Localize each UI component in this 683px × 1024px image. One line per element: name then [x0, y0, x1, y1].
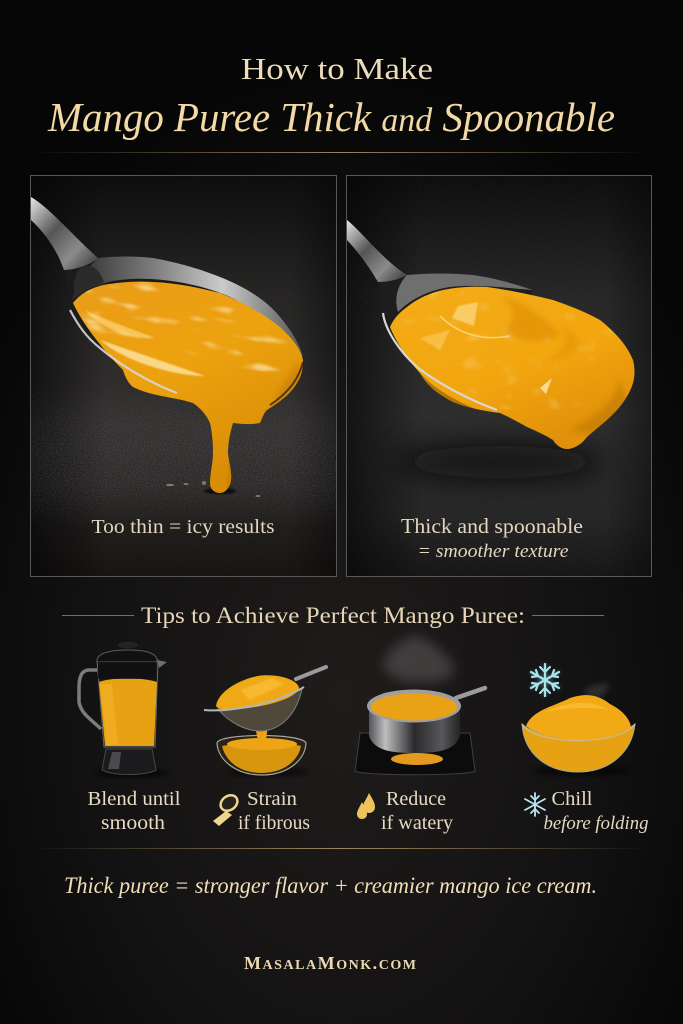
bowl body	[522, 724, 635, 772]
label: reduce: Reduce	[386, 788, 446, 810]
bowl rim	[522, 724, 635, 740]
label: blend: smooth	[101, 812, 165, 834]
mango puree: thin with drip	[69, 282, 304, 493]
steam	[384, 636, 455, 682]
mango puree: thick mound	[383, 287, 640, 449]
lower spoon rim over puree	[70, 310, 177, 393]
label: blend: Blend until	[88, 788, 181, 810]
bowl puree	[526, 695, 631, 740]
caption: too thin: Too thin = icy results	[92, 516, 275, 538]
caption: thick: = smoother texture	[418, 541, 568, 562]
puddle spatter	[166, 481, 260, 497]
caption: thick	[401, 514, 583, 562]
blender handle	[79, 670, 101, 729]
strainer rim	[204, 687, 304, 710]
snowflake large	[531, 664, 559, 696]
tip: chill bowl	[522, 664, 635, 775]
shadow under spoon	[395, 446, 605, 478]
label: chill	[544, 788, 648, 834]
label: reduce	[381, 788, 453, 834]
pan puree	[371, 694, 457, 720]
pan handle	[456, 688, 485, 698]
lower spoon rim over puree	[383, 313, 497, 410]
strainer puree	[216, 675, 299, 710]
spoon: right	[347, 220, 533, 413]
tip: strainer	[204, 667, 326, 776]
brand footer: MASALAMONK.COM	[244, 953, 416, 973]
burner	[355, 733, 475, 775]
spoon: left	[31, 197, 303, 397]
label: chill: Chill	[552, 788, 593, 810]
icon: sieve spoon	[213, 792, 240, 826]
panel: too thin puree	[30, 176, 336, 576]
label: strain	[238, 788, 310, 834]
tip labels	[88, 788, 648, 834]
tip: blender	[79, 642, 168, 777]
label: strain: Strain	[247, 788, 297, 810]
takeaway line: Thick puree = stronger flavor + creamier mango ice cream.	[64, 873, 597, 898]
icon: small snowflake	[525, 793, 545, 816]
caption: thick: Thick and spoonable	[401, 514, 583, 538]
label: reduce: if watery	[381, 812, 453, 834]
receiving bowl	[217, 736, 306, 775]
strainer mesh	[218, 689, 302, 731]
title: How to Make	[241, 51, 433, 86]
blender jar	[97, 660, 158, 747]
label: blend	[88, 788, 181, 834]
strainer handle	[296, 667, 326, 679]
icon: water drops	[357, 793, 375, 819]
puree stream	[255, 726, 268, 746]
panel: thick puree	[346, 176, 652, 576]
blender puree	[99, 678, 157, 746]
tip: saucepan	[355, 636, 485, 775]
label: strain: if fibrous	[238, 812, 310, 834]
label: chill: before folding	[544, 814, 648, 834]
blender base	[102, 749, 156, 774]
blender lid	[97, 650, 157, 662]
tips heading: Tips to Achieve Perfect Mango Puree:	[141, 603, 525, 628]
title: Mango Puree Thick and Spoonable	[47, 94, 615, 140]
steam wisp	[584, 682, 608, 699]
pan body	[369, 708, 460, 753]
title	[47, 51, 615, 140]
